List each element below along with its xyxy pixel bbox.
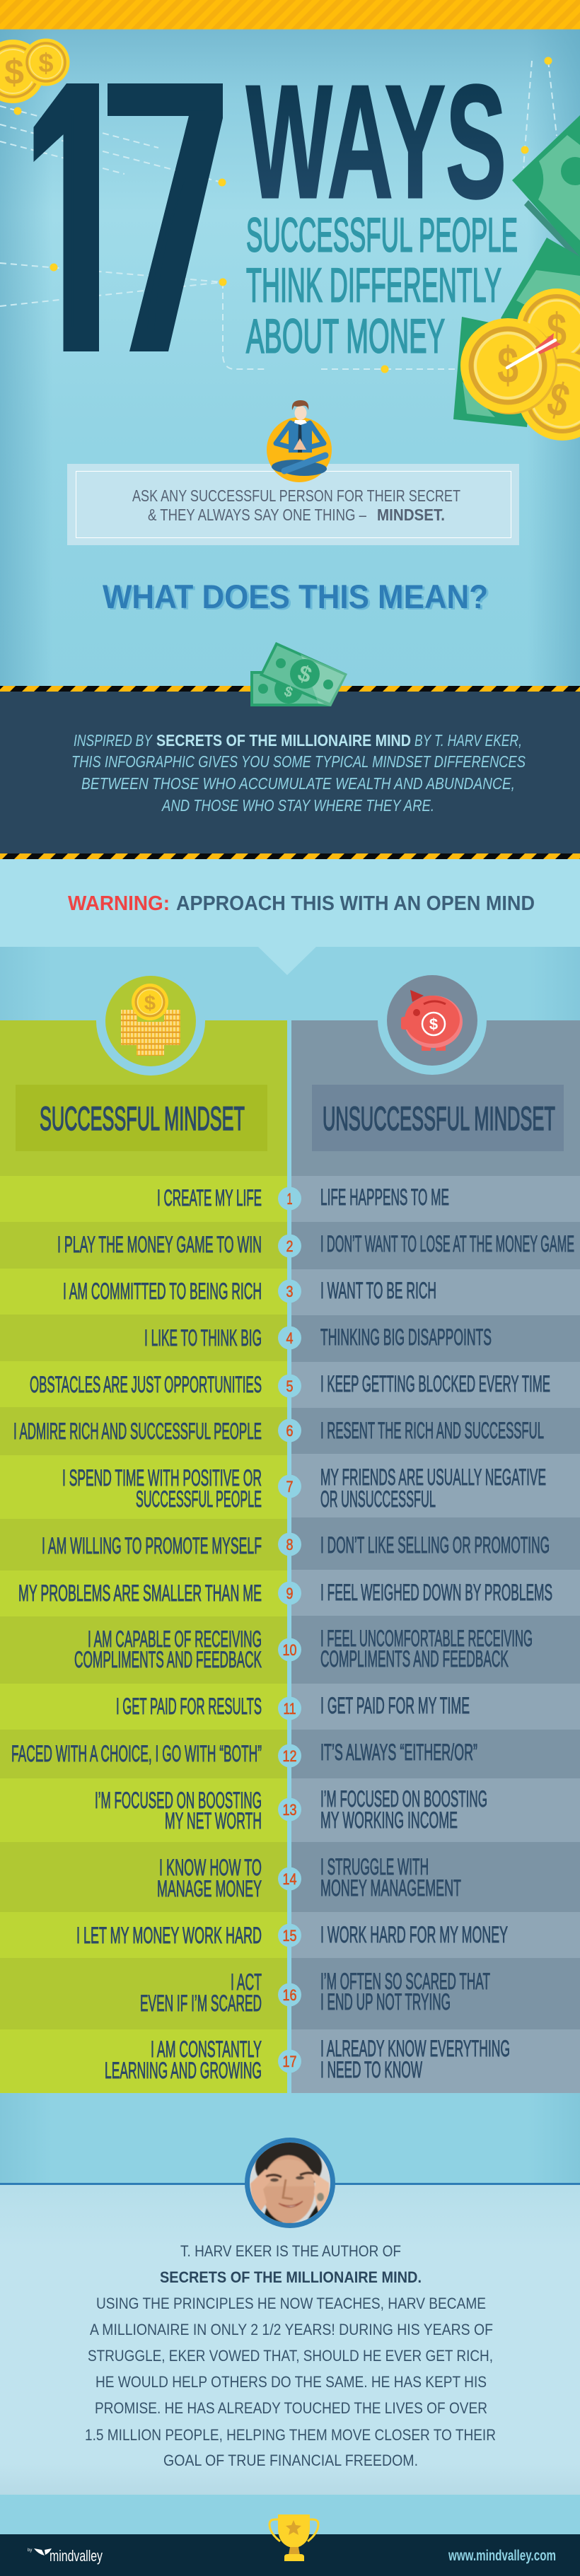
subtitle [246,208,518,363]
dashed connector lines with dots [0,57,557,373]
row 17 [0,2029,580,2093]
row 7: OR UNSUCCESSFUL [320,1486,436,1512]
row 17: 17 [283,2053,297,2070]
row 16: 16 [283,1986,297,2004]
row 8 [0,1517,580,1570]
row 10: COMPLIMENTS AND FEEDBACK [74,1647,262,1672]
panel: author bio background [0,2183,580,2495]
top gold stripe banner [0,0,580,30]
icon: coin stack: $ [144,992,156,1015]
heading: successful mindset: SUCCESSFUL MINDSET [40,1100,245,1137]
intro paragraph: INSPIRED BY [74,731,153,750]
row 12: FACED WITH A CHOICE, I GO WITH “BOTH” [11,1741,262,1766]
callout: mindset box: ASK ANY SUCCESSFUL PERSON FOR THEIR SECRET [132,486,460,505]
icon: banknotes [250,642,347,706]
row 5 [0,1361,580,1408]
row 9: 9 [286,1585,293,1602]
title number 17: 1 [7,6,127,433]
intro paragraph [71,731,526,815]
icon: banknotes: $ [282,684,295,701]
logo: mindvalley: mindvalley [50,2547,103,2565]
row 15 [0,1912,580,1958]
author bio text: 1.5 MILLION PEOPLE, HELPING THEM MOVE CLOSER TO THEIR [85,2426,496,2444]
author bio text: A MILLIONAIRE IN ONLY 2 1/2 YEARS! DURING HIS YEARS OF [90,2321,493,2338]
row 14: I STRUGGLE WITH [320,1854,429,1879]
row 12 [0,1730,580,1778]
illustration: money and coins with arrow: $ [543,372,575,427]
callout: mindset box: & THEY ALWAYS SAY ONE THING – [148,506,366,524]
row 10 [0,1616,580,1684]
row 6: I ADMIRE RICH AND SUCCESSFUL PEOPLE [13,1418,262,1444]
row 13 [0,1778,580,1842]
author bio text: HE WOULD HELP OTHERS DO THE SAME. HE HAS KEPT HIS [95,2373,487,2391]
row 5: 5 [286,1377,293,1395]
dark footer bar [0,2534,580,2576]
author bio text: GOAL OF TRUE FINANCIAL FREEDOM. [163,2452,418,2469]
row 1: I CREATE MY LIFE [157,1185,262,1211]
title number 17 [34,83,223,351]
row 17: LEARNING AND GROWING [105,2058,262,2083]
row 14: MANAGE MONEY [157,1876,262,1901]
row 3: I WANT TO BE RICH [320,1278,436,1303]
row 12: 12 [283,1747,297,1765]
intro paragraph: AND THOSE WHO STAY WHERE THEY ARE. [161,796,434,815]
row 14 [0,1842,580,1912]
author bio text: STRUGGLE, EKER VOWED THAT, SHOULD HE EVER GET RICH, [88,2347,493,2365]
row 11 [0,1684,580,1730]
row 11: I GET PAID FOR RESULTS [116,1694,262,1719]
row 14: 14 [283,1870,297,1888]
warning band [0,859,580,947]
row 11: 11 [283,1700,296,1718]
warning text: WARNING: [68,892,170,915]
author bio text: PROMISE. HE HAS ALREADY TOUCHED THE LIVES OF OVER [95,2399,487,2417]
author bio text: SECRETS OF THE MILLIONAIRE MIND. [160,2268,422,2286]
row 2 [0,1222,580,1269]
row 8: 8 [286,1536,293,1554]
row 16: I ACT [231,1969,262,1995]
row 3 [0,1269,580,1315]
row 9: MY PROBLEMS ARE SMALLER THAN ME [18,1580,262,1606]
row 4 [0,1315,580,1362]
icon: piggy bank: $ [429,1015,438,1033]
illustration: money and coins with arrow [453,115,580,441]
row 4: 4 [286,1329,293,1347]
logo: mindvalley [28,2547,103,2565]
icon: meditating man [267,400,332,482]
row 3: I AM COMMITTED TO BEING RICH [63,1278,262,1304]
row 13: 13 [283,1801,297,1819]
heading: what does this mean: WHAT DOES THIS MEAN? [105,579,490,617]
row 14: MONEY MANAGEMENT [320,1875,461,1901]
row 8: I AM WILLING TO PROMOTE MYSELF [42,1533,262,1558]
row 13: I’M FOCUSED ON BOOSTING [95,1788,262,1813]
row 7: I SPEND TIME WITH POSITIVE OR [62,1465,262,1491]
row 14: I KNOW HOW TO [159,1855,262,1880]
row 5: OBSTACLES ARE JUST OPPORTUNITIES [30,1372,262,1397]
icon: banknotes: $ [294,660,315,688]
panel: right column header [291,966,580,1176]
intro paragraph: SECRETS OF THE MILLIONAIRE MIND [156,731,411,750]
lower blue band [0,2093,580,2183]
icon: coin stack [121,984,180,1056]
icon: coins top left: $ [4,52,24,92]
header background [0,29,580,687]
icon: piggy bank [401,990,463,1051]
author portrait [245,2138,335,2230]
row 15: 15 [283,1927,297,1945]
row 7: SUCCESSFUL PEOPLE [136,1486,262,1512]
author bio text: USING THE PRINCIPLES HE NOW TEACHES, HARV BECAME [96,2295,486,2312]
row 16: EVEN IF I’M SCARED [140,1991,262,2016]
row 2: 2 [286,1237,293,1255]
row 16: I END UP NOT TRYING [320,1989,451,2015]
intro paragraph: BY T. HARV EKER, [414,731,522,750]
row 2: I PLAY THE MONEY GAME TO WIN [57,1232,262,1257]
row 17: I NEED TO KNOW [320,2057,422,2082]
logo: mindvalley: by [28,2548,32,2553]
row 10: I AM CAPABLE OF RECEIVING [88,1626,262,1652]
row 6 [0,1407,580,1455]
dark intro band with hazard stripes [0,686,580,859]
row 13: MY NET WORTH [165,1808,262,1834]
row 1: LIFE HAPPENS TO ME [320,1184,449,1210]
illustration: money and coins with arrow: $ [547,303,567,356]
row 10: 10 [283,1641,297,1659]
row 7: 7 [286,1478,293,1496]
author bio text: T. HARV EKER IS THE AUTHOR OF [180,2242,401,2260]
blue footer band [0,2495,580,2534]
row 4: I LIKE TO THINK BIG [144,1325,262,1351]
callout: mindset box [67,464,519,545]
row 7 [0,1454,580,1519]
row 1: 1 [287,1190,293,1208]
title number 17: 7 [102,6,228,433]
callout: mindset box: MINDSET. [377,506,445,524]
warning text: APPROACH THIS WITH AN OPEN MIND [176,892,535,915]
row 9 [0,1570,580,1616]
comparison header area [0,947,580,1020]
row 16 [0,1958,580,2029]
heading: what does this mean: WHAT DOES THIS MEAN? [103,578,488,615]
row 3: 3 [286,1283,293,1300]
icon: coins top left [0,38,69,103]
icon: trophy [269,2514,318,2561]
row 17: I AM CONSTANTLY [151,2036,262,2062]
panel: left column header [0,967,287,1176]
row 15: I LET MY MONEY WORK HARD [76,1923,262,1948]
row 6: 6 [286,1422,293,1440]
author bio text [85,2242,496,2469]
row 13: MY WORKING INCOME [320,1807,458,1833]
row 1 [0,1176,580,1222]
illustration: money and coins with arrow: $ [497,337,518,394]
icon: coins top left: $ [38,49,54,78]
rows backdrop centre strip [287,1020,291,2093]
